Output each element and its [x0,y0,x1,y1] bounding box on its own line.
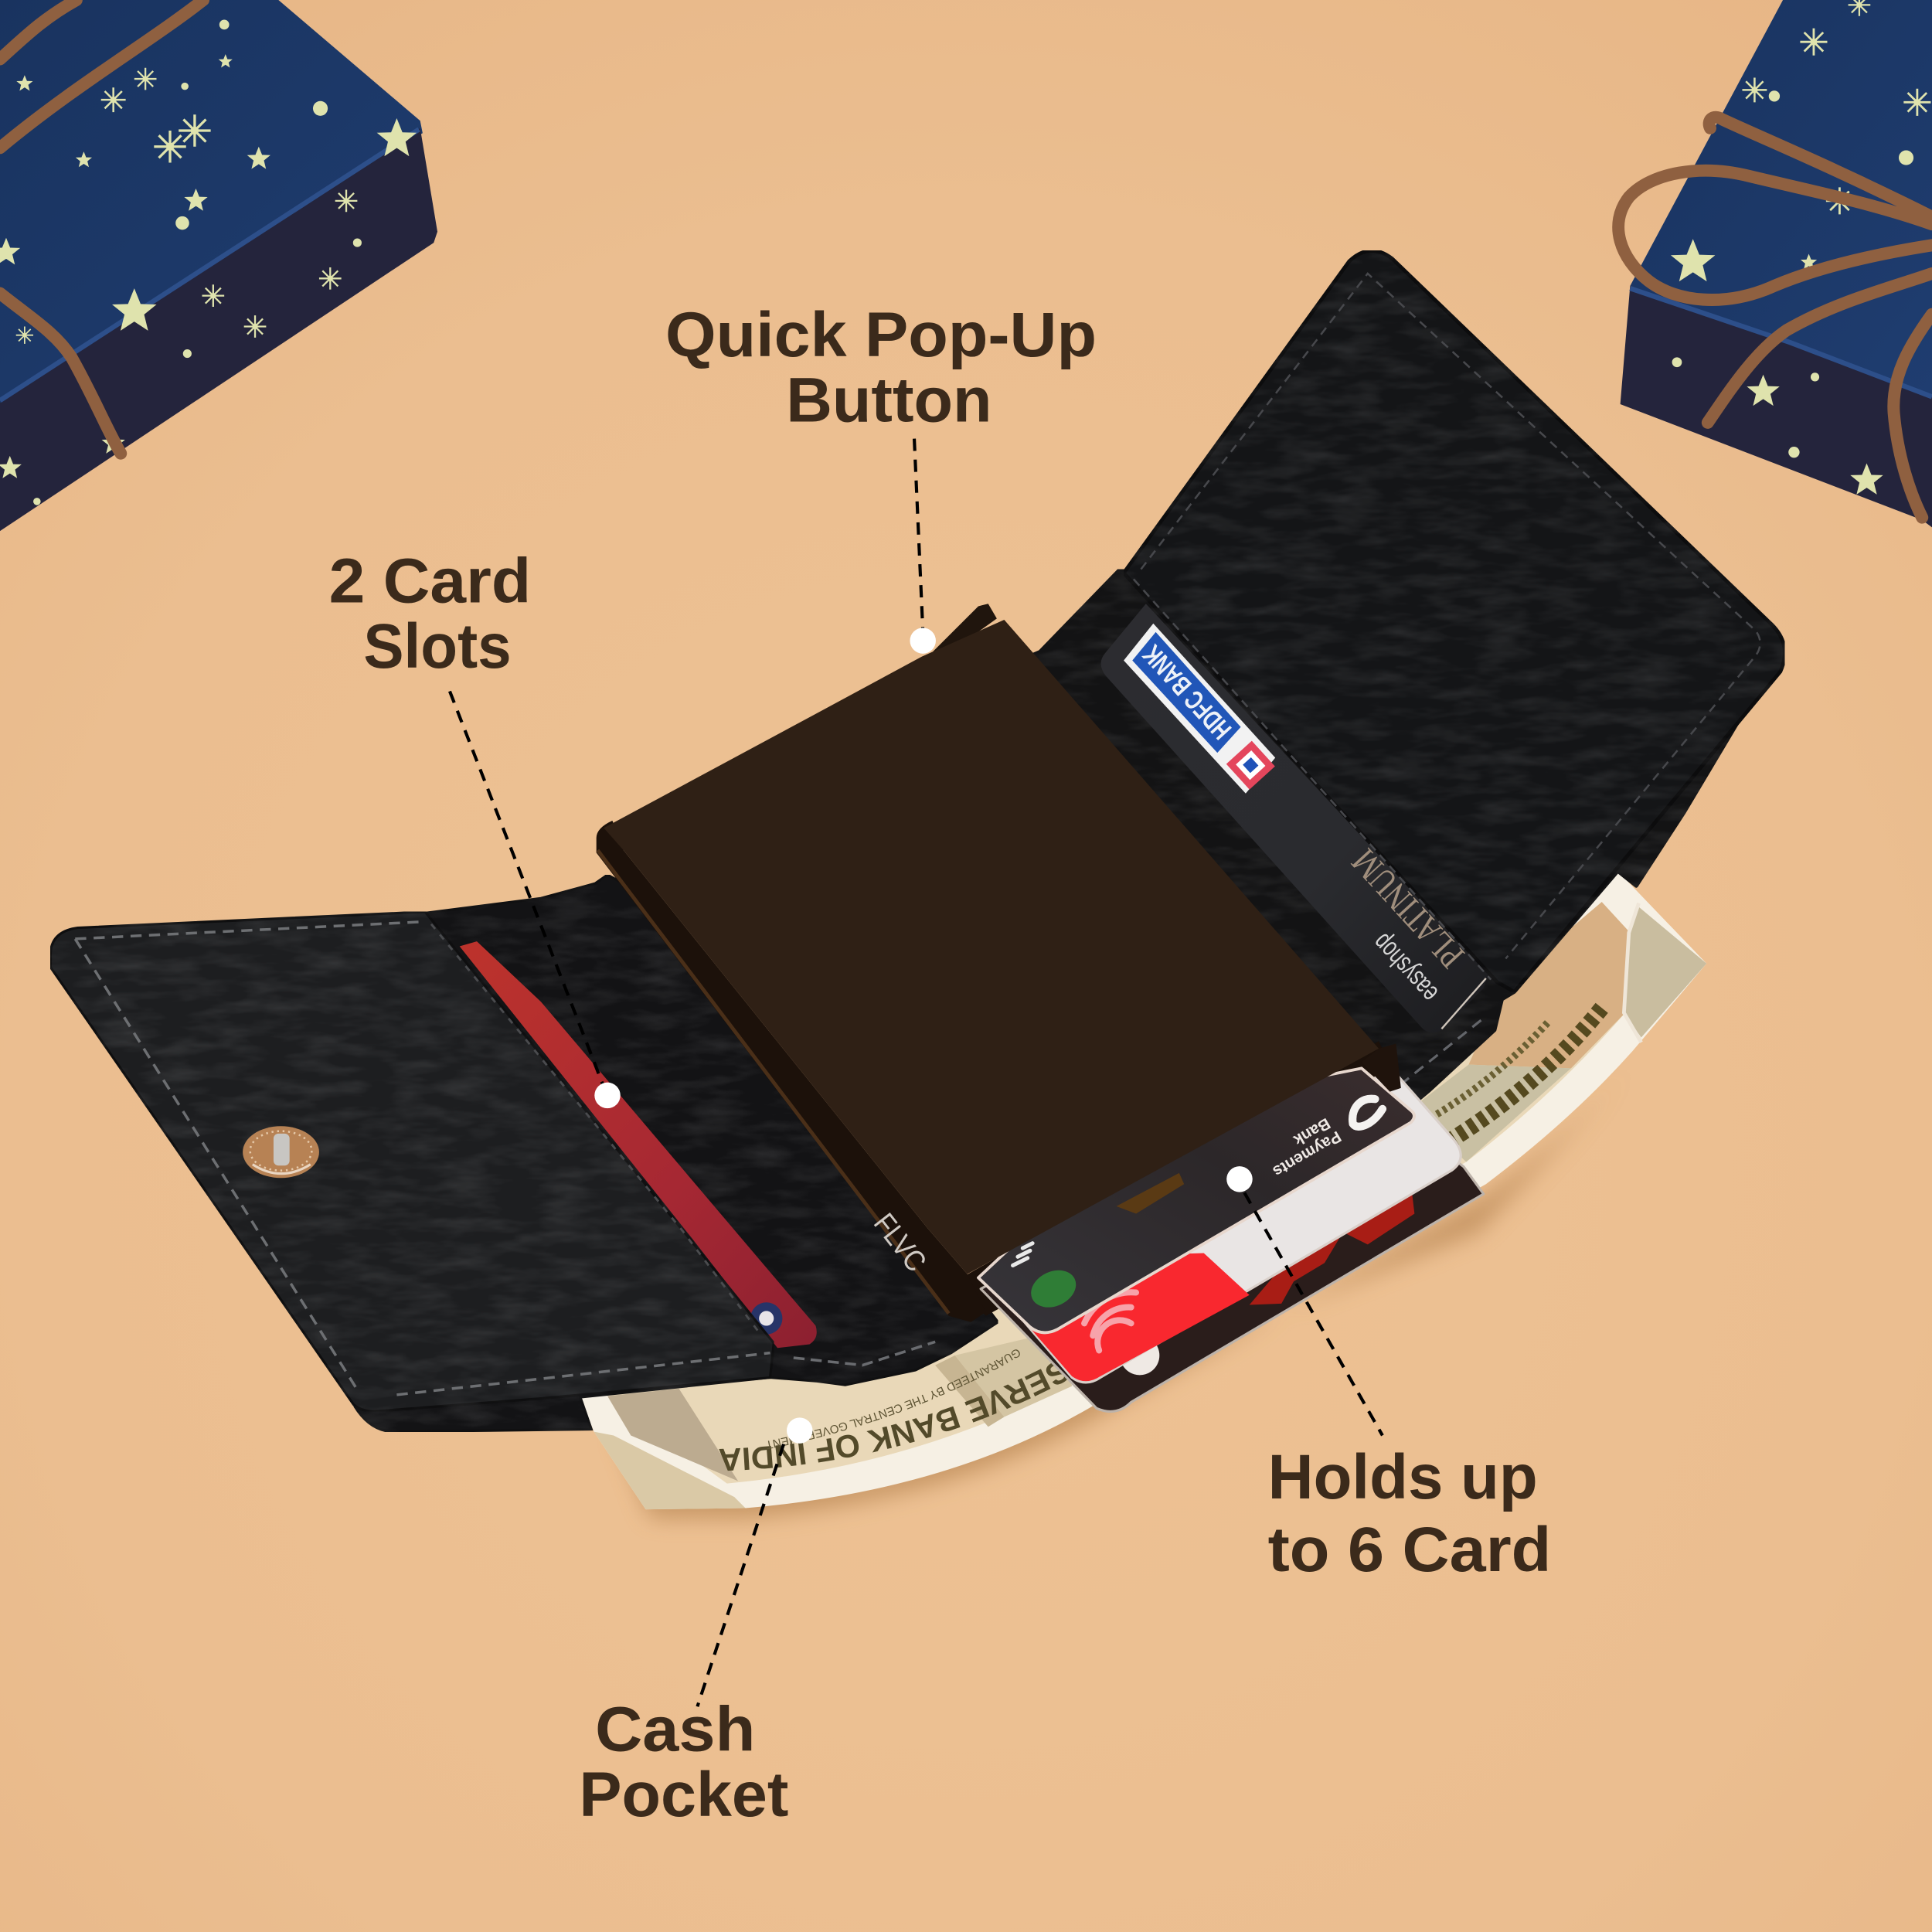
gift box: top right [1618,0,1932,527]
card edge highlight [1441,978,1486,1029]
wallet: left flap [50,912,774,1411]
wallet: right flap [1124,250,1784,992]
stitching: left flap inner [431,924,758,1331]
marker dot [787,1417,812,1444]
banknote [582,873,1706,1510]
HDFC text: HDFC BANK [1137,639,1237,745]
easyshop text: easyshop [1367,927,1444,1008]
stitching: left flap [75,922,770,1395]
wallet: left back panel [354,875,998,1432]
card case right lip [1362,1043,1401,1092]
top card green badge [1025,1264,1082,1315]
leader line [697,1444,784,1706]
red card in left pocket [460,941,817,1348]
card case logo: FLVC [867,1207,933,1278]
marker dot [594,1083,621,1108]
stitching: right pocket [1401,1020,1481,1084]
heading [665,300,1097,435]
top card text: Bank: Bank [1290,1114,1333,1149]
heading: Holds up [1268,1442,1538,1512]
pop-up button [933,604,997,653]
marker dot [910,628,936,654]
heading [329,546,531,682]
middle card [1013,1070,1461,1383]
heading: Cash [595,1695,755,1765]
card case face [604,620,1379,1274]
card case interior shadow [955,1041,1401,1316]
banknote text: reserve bank of india [717,1335,1100,1449]
wallet: right lower layer [1022,570,1757,1103]
banknote corner: left [594,1432,746,1509]
bottom card [981,1084,1484,1411]
leader line [914,439,923,631]
banknote green-grey area [1411,1065,1571,1162]
top card [978,1068,1414,1332]
marker dot [1226,1166,1253,1192]
banknote small path [752,1348,1018,1444]
gift box: top left [0,0,437,531]
shadow under banknote [616,974,1719,1518]
heading: Slots [363,611,512,682]
card case side edge [597,850,949,1314]
heading [1268,1442,1551,1585]
banknote chevron line [1624,903,1641,1043]
heading: 2 Card [329,546,531,617]
heading [579,1695,788,1830]
banknote devanagari printing: small [1435,1022,1548,1115]
banknote corner: right [1624,906,1706,1037]
top card nfc marks [1013,1243,1032,1265]
PLATINUM text: PLATINUM [1344,841,1472,976]
stitching: left back panel [794,1342,935,1366]
leader line [1244,1192,1383,1435]
top card swirl logo [1352,1099,1383,1127]
banknote textured area [955,1331,1072,1417]
HDFC blue band [1124,624,1275,794]
callout: cash pocket [579,1417,812,1830]
credit card: HDFC platinum [1101,604,1488,1032]
stitching: right flap [1134,274,1760,980]
banknote: GUARANTEED BY THE CENTRAL GOVERNMENT [767,1349,1020,1450]
callout: holds up to 6 card [1226,1166,1551,1585]
leader line [450,691,604,1087]
banknote body: lower [607,902,1630,1484]
callout: quick pop-up button [665,300,1097,654]
heading: Quick Pop-Up [665,300,1097,370]
HDFC logo [1226,741,1275,790]
banknote dotted band: left [607,1389,738,1481]
card case side [597,821,986,1322]
card stack [978,1068,1484,1411]
callout: 2 card slots [329,546,621,1108]
banknote dotted band: middle [935,1355,1004,1427]
top card text: Payments: Payments [1270,1128,1344,1181]
top card chip [1117,1173,1184,1213]
bottom card logo crescent [1120,1335,1159,1375]
heading: to 6 Card [1268,1515,1551,1585]
red card logo [750,1302,782,1335]
middle card red area [1015,1253,1250,1381]
HDFC blue area [1132,632,1241,753]
bottom card red artwork [1250,1183,1414,1304]
snap button [243,1126,319,1178]
contactless icon [1084,1292,1136,1350]
banknote devanagari printing [1451,1008,1602,1140]
banknote: RESERVE BANK OF INDIA [719,1363,1067,1471]
heading: Pocket [579,1760,788,1830]
heading: Button [786,365,992,435]
banknote tan area: upper right [1469,902,1630,1068]
